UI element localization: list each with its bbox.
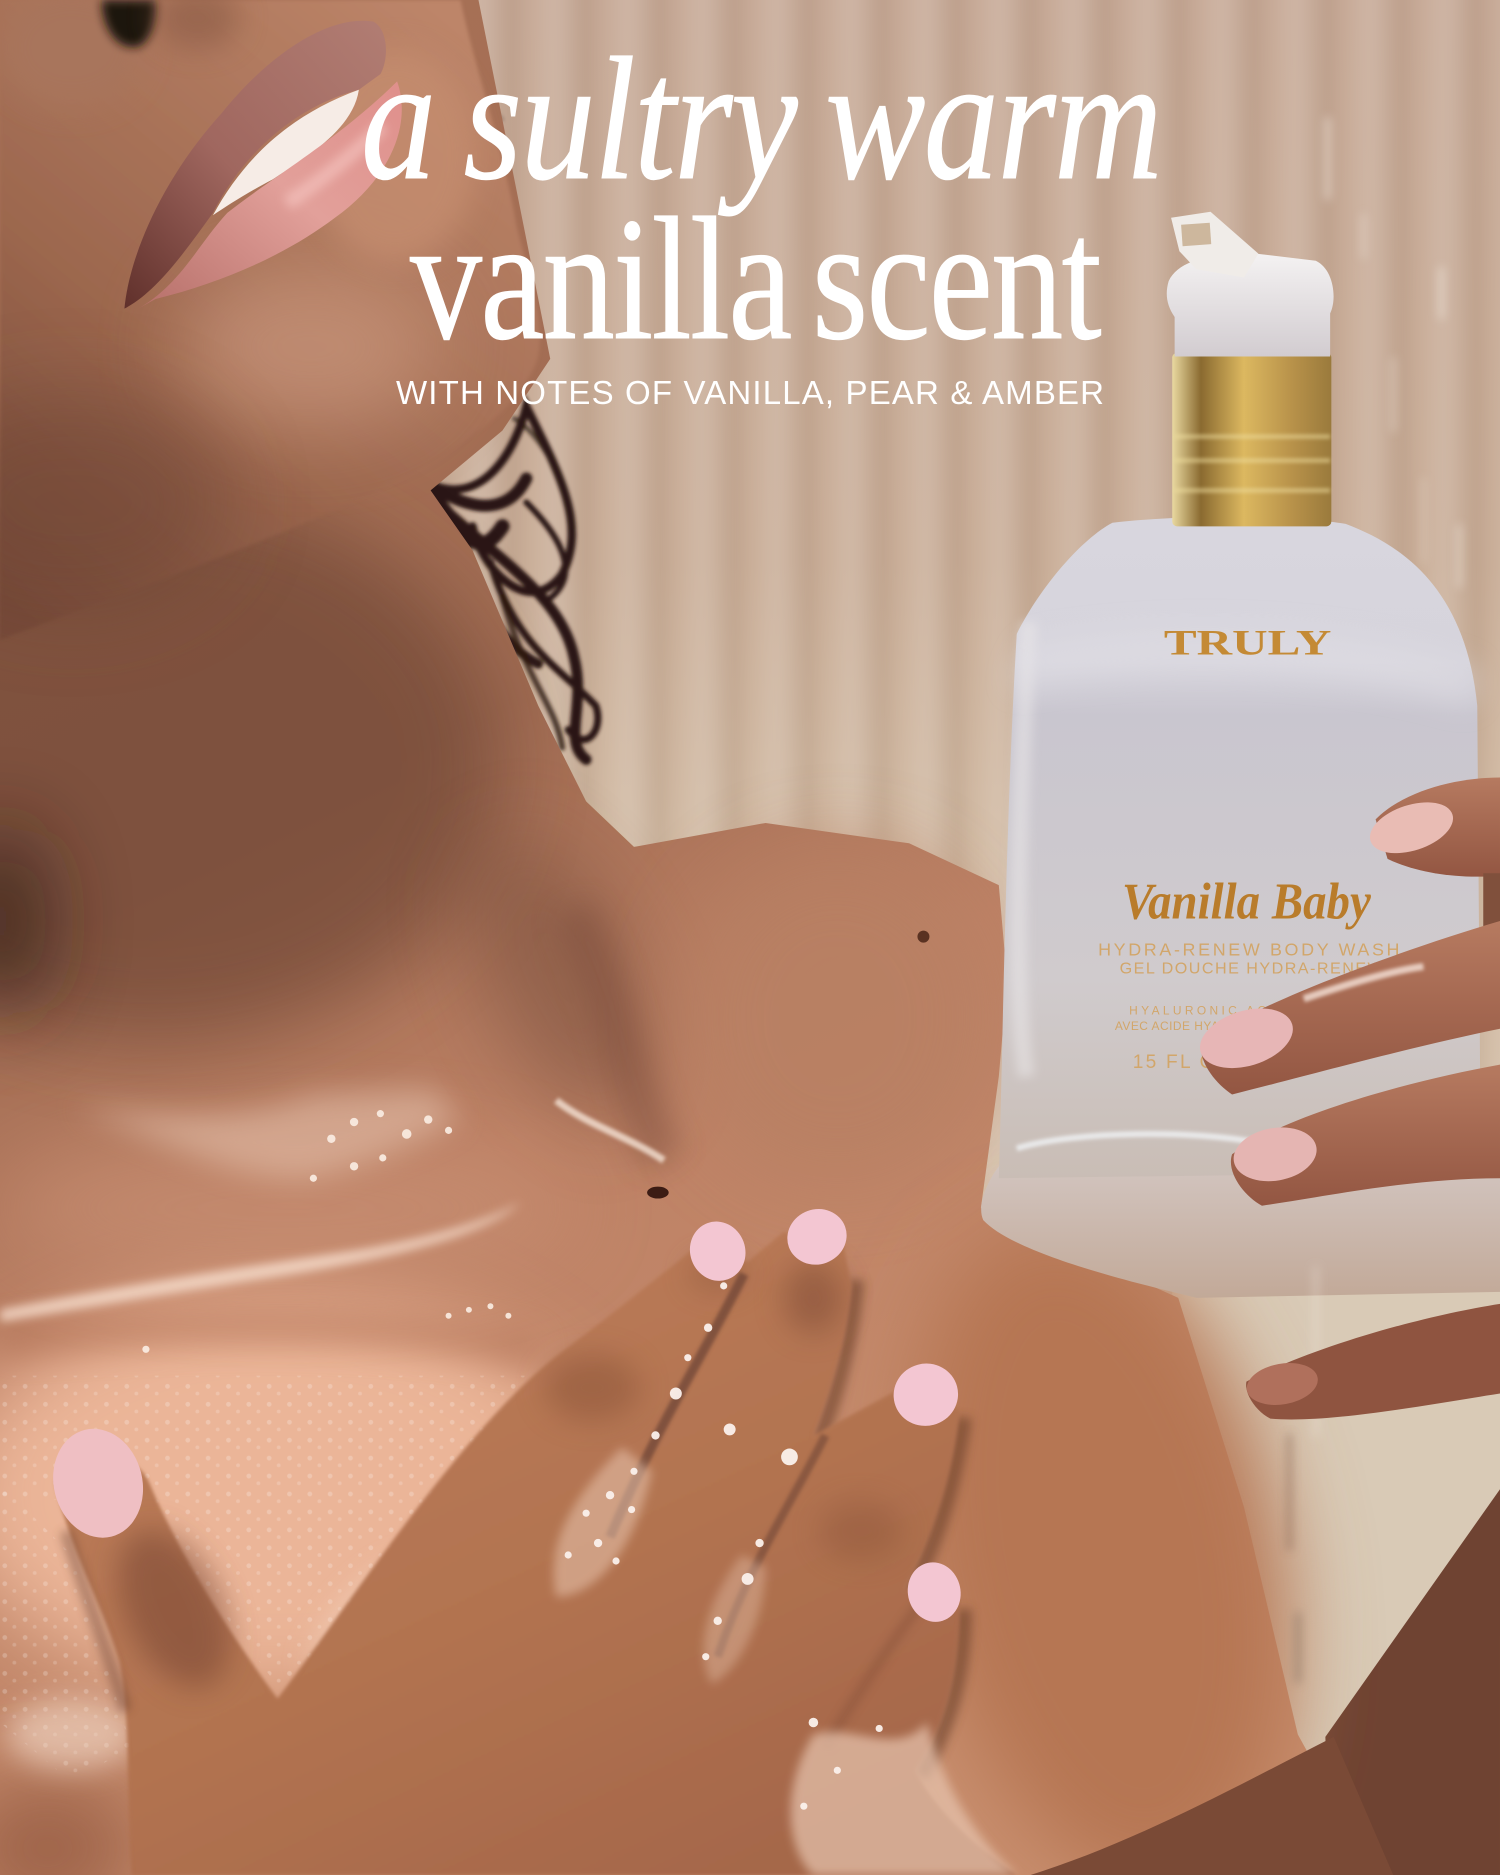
finger gap two: [718, 1435, 825, 1657]
pump spout: [1171, 212, 1258, 278]
bottle body: [999, 517, 1481, 1178]
title line two: vanilla scent: [410, 182, 1101, 377]
finger gap three: [825, 1603, 921, 1746]
knuckle shadows: [544, 1354, 640, 1421]
finger two: [1193, 921, 1500, 1094]
finger edge shadows: [818, 1280, 964, 1776]
finger three: [1229, 1065, 1500, 1206]
finger four: [1243, 1304, 1500, 1419]
face with chin: [0, 0, 540, 640]
bottle label text: TRULY: [1164, 622, 1331, 662]
water gloss on chest: [0, 1202, 520, 1322]
lower lip: [134, 81, 402, 311]
bottle label text: HYALURONIC ACID: [1129, 1003, 1285, 1017]
soap foam: [791, 1722, 1017, 1875]
bottle label text: Vanilla Baby: [1122, 874, 1371, 931]
forearm at lower right: [1325, 1489, 1500, 1875]
holding hand fingers: [1193, 778, 1500, 1419]
teeth: [213, 90, 359, 215]
wrist band shadow: [1029, 1737, 1394, 1875]
Truly Vanilla Baby bottle: [981, 212, 1500, 1298]
cheek highlight: [179, 263, 443, 431]
bottle label text: GEL DOUCHE HYDRA-RENEW: [1120, 960, 1384, 978]
upper lip: [124, 21, 386, 309]
bottle label text: HYDRA-RENEW BODY WASH: [1098, 940, 1400, 960]
collarbone shadow: [0, 1328, 538, 1352]
droplets on collarbone: [142, 1110, 511, 1353]
pump cap: [1167, 254, 1334, 356]
title line one: a sultry warm: [361, 22, 1161, 217]
gold collar: [1172, 353, 1331, 526]
bottle base: [981, 1148, 1500, 1298]
rain streaks: [1289, 120, 1459, 1681]
chest glow: [0, 1292, 598, 1699]
eye and nose shadow: [0, 0, 144, 108]
nails: [42, 1201, 966, 1627]
finger gap one: [610, 1274, 744, 1537]
wet curly hair: [416, 0, 598, 760]
foreground hand on chest: [42, 1201, 1017, 1875]
shoulder tone: [682, 849, 993, 1184]
bottle label text: [1098, 622, 1400, 1073]
finger one: [1364, 778, 1500, 877]
moles: [647, 1187, 669, 1199]
bottle label text: 15 FL OZ: [1133, 1052, 1229, 1073]
soap bubbles: [565, 1282, 883, 1810]
palm edge: [1483, 873, 1500, 933]
neck shadow: [0, 490, 502, 1041]
bottle label text: AVEC ACIDE HYALURONIQUE: [1115, 1019, 1294, 1033]
thumb shadow: [95, 1513, 252, 1705]
subtitle: WITH NOTES OF VANILLA, PEAR & AMBER: [396, 374, 1104, 411]
